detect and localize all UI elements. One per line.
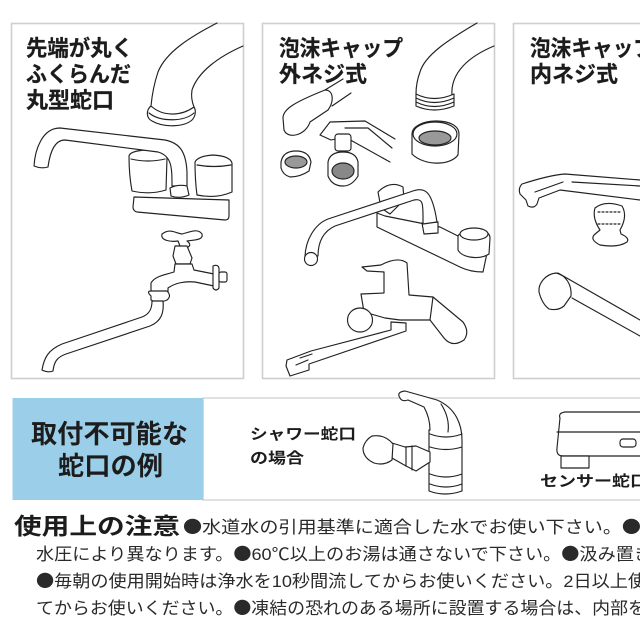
- banner: non-installable faucets: 蛇口の例: [58, 451, 163, 481]
- heading: round-tip faucet: ふくらんだ: [26, 62, 131, 87]
- panel: round-tip faucet: [12, 23, 244, 378]
- text block: usage notes body: てからお使いください。 ●凍結の恐れのある場所に設置する場合は、内部を: [36, 594, 640, 619]
- heading: foam cap inner thread: [530, 36, 640, 87]
- label: shower faucet: の場合: [250, 450, 304, 467]
- heading: usage notes: 使用上の注意: [14, 513, 180, 539]
- icon: inner thread aerator: [593, 203, 628, 246]
- icon: cross-handle wall faucet: [42, 231, 227, 372]
- icon: threaded spout and foam cap: [412, 23, 494, 163]
- text block: usage notes body: ●水道水の引用基準に適合した水でお使い下さい。 ●: [183, 513, 640, 538]
- heading: round-tip faucet: 丸型蛇口: [26, 88, 114, 113]
- banner: non-installable faucets: 取付不可能な: [31, 419, 188, 449]
- panel: non-installable faucet examples: [12, 391, 640, 500]
- section: usage notes: [14, 513, 640, 619]
- heading: foam cap inner thread: 内ネジ式: [530, 62, 618, 87]
- icon: two-handle deck faucet: [34, 128, 232, 220]
- heading: foam cap outer thread: 外ネジ式: [279, 62, 367, 87]
- panel: foam cap inner thread: [514, 24, 640, 378]
- heading: foam cap outer thread: 泡沫キャップ: [279, 36, 403, 61]
- icon: sensor faucet: [557, 412, 640, 468]
- icon: shower faucet: [363, 391, 462, 494]
- panel: foam cap outer thread: [262, 23, 494, 378]
- banner: non-installable faucets: [12, 398, 204, 500]
- icon: small spout parts and aerators: [281, 79, 395, 186]
- text block: usage notes body: ●毎朝の使用開始時は浄水を10秒間流してからお使いください。2日以上使: [36, 567, 640, 592]
- label: shower faucet: [250, 426, 356, 467]
- icon: shower-head pull-out faucet: [539, 273, 640, 336]
- text block: usage notes body: [36, 513, 640, 619]
- heading: round-tip faucet: [26, 36, 133, 113]
- heading: foam cap outer thread: [279, 36, 403, 87]
- label: shower faucet: シャワー蛇口: [250, 426, 356, 443]
- icon: flat spout: [519, 174, 640, 207]
- label: sensor faucet: センサー蛇口: [540, 473, 640, 490]
- text block: usage notes body: 水圧により異なります。 ●60℃以上のお湯は通さないで下さい。 ●汲み置き: [36, 540, 640, 565]
- icon: enlarged round spout tip: [147, 23, 243, 126]
- icon: deck faucet with knob: [304, 184, 490, 272]
- heading: round-tip faucet: 先端が丸く: [26, 36, 133, 61]
- icon: wall single-lever faucet: [286, 260, 467, 376]
